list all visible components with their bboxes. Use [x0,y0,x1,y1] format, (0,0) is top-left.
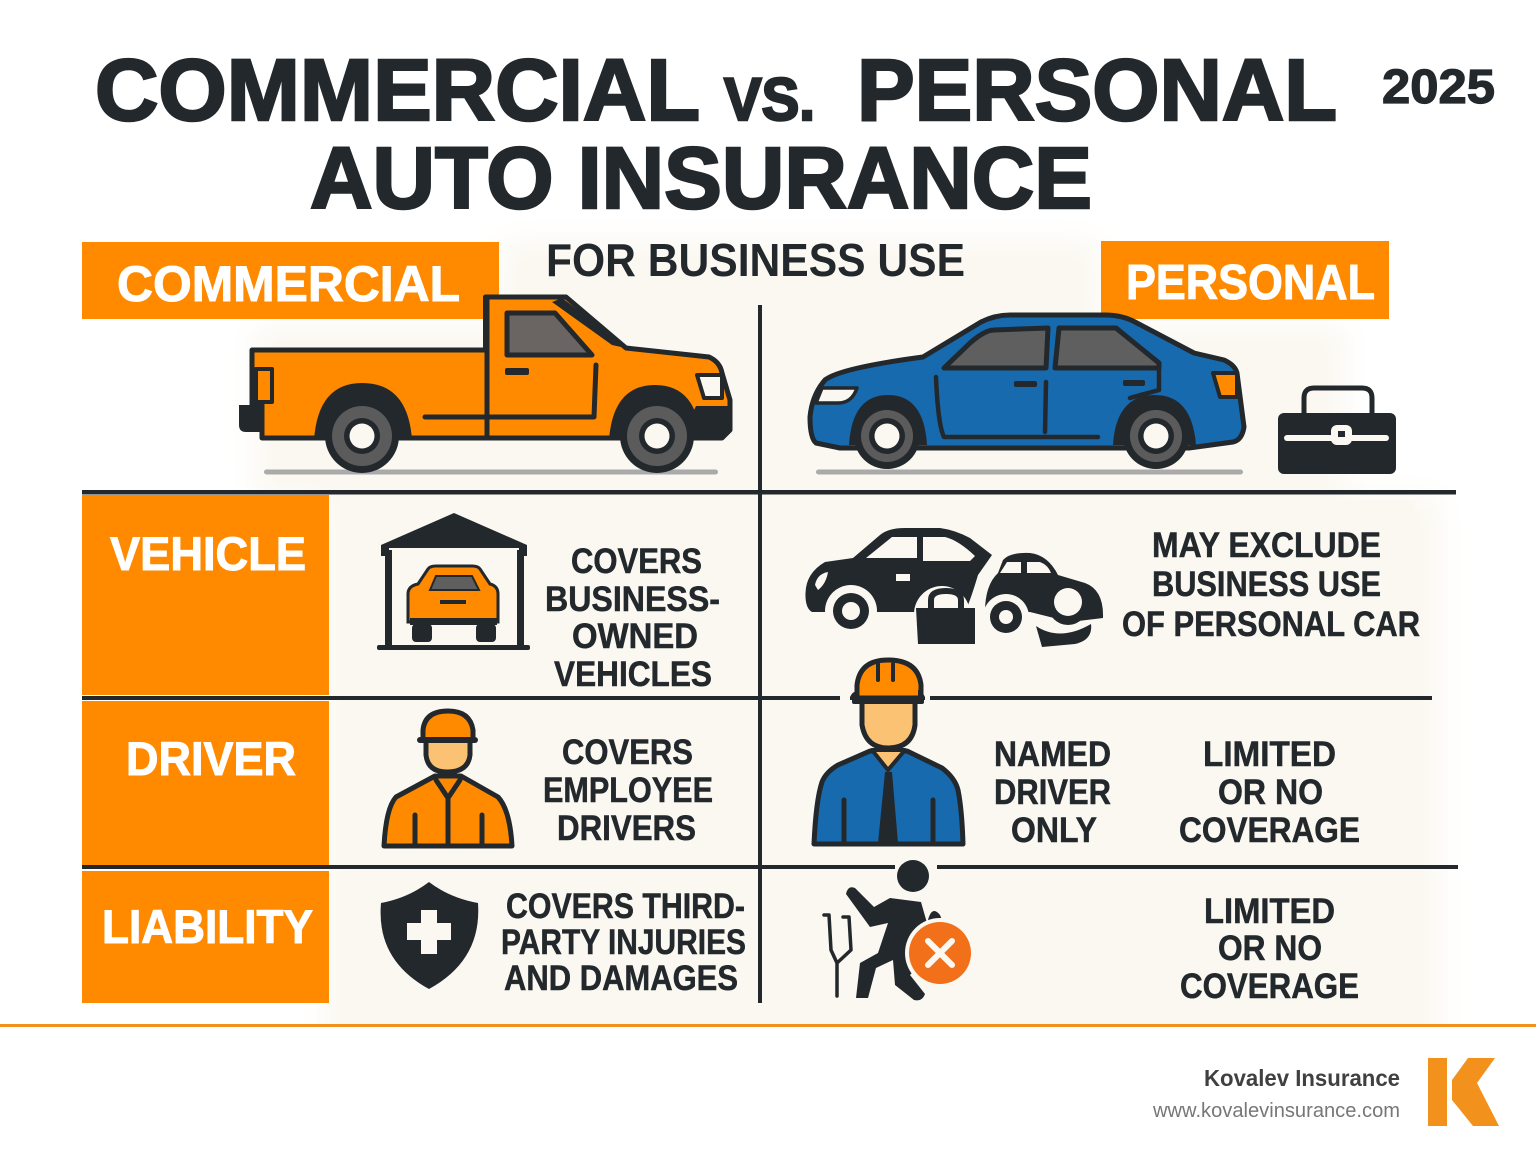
text: may exclude business use: BUSINESS USE [1152,565,1381,604]
text: named driver only [994,735,1111,850]
title: AUTO INSURANCE [310,130,1092,227]
icon: garage with orange car [377,513,530,650]
row label: vehicle: VEHICLE [110,527,306,580]
row label: liability: LIABILITY [102,900,313,953]
text: may exclude business use: MAY EXCLUDE [1152,526,1381,565]
text: covers business-owned vehicles: COVERS [571,542,702,581]
text: covers third-party injuries: PARTY INJURIES [501,923,746,962]
title [95,42,1337,227]
text: named driver only: NAMED [994,735,1111,774]
icon: briefcase [1278,388,1396,474]
text: covers employee drivers: COVERS [562,733,693,772]
icon: injured person with crutch and x badge [824,860,975,1000]
text: limited or no coverage (liability): LIMITED [1204,892,1335,931]
header: personal [1101,241,1389,319]
text: limited or no coverage (liability): COVERAGE [1180,967,1359,1006]
text: covers employee drivers [543,733,713,848]
header: commercial [82,242,499,319]
footer: brand text: www.kovalevinsurance.com [1152,1100,1400,1122]
icon: orange pickup truck [239,297,732,474]
text: limited or no coverage (driver): LIMITED [1203,735,1336,774]
text: covers business-owned vehicles: VEHICLES [554,655,712,694]
text: limited or no coverage (driver): OR NO [1218,773,1323,812]
text: limited or no coverage (liability): OR NO [1218,929,1322,968]
row label: driver [82,701,329,865]
text: covers business-owned vehicles [545,542,720,694]
icon: shield with cross [381,882,478,989]
text: covers business-owned vehicles: OWNED [572,617,698,656]
row label: driver: DRIVER [126,732,296,785]
footer: brand text [1152,1065,1400,1122]
footer: brand text: Kovalev Insurance [1204,1065,1400,1091]
text: limited or no coverage (driver): COVERAGE [1179,811,1360,850]
row label: vehicle [82,495,329,695]
header: commercial: COMMERCIAL [117,256,460,312]
text: covers third-party injuries [501,887,746,998]
footer: K logo [1428,1058,1499,1126]
icon: blue sedan [810,315,1244,474]
text: limited or no coverage (driver) [1179,735,1360,850]
title: VS. [724,66,815,133]
subtitle: FOR BUSINESS USE [546,234,965,286]
text: covers employee drivers: DRIVERS [557,809,696,848]
text: covers third-party injuries: AND DAMAGES [504,959,738,998]
text: named driver only: DRIVER [994,773,1111,812]
header: personal: PERSONAL [1126,256,1375,310]
text: named driver only: ONLY [1011,811,1097,850]
icon: named driver with hard hat [814,660,963,844]
text: covers employee drivers: EMPLOYEE [543,771,713,810]
icon: black cars and lock [805,528,1103,647]
icon: employee driver [384,711,512,846]
text: may exclude business use [1122,526,1420,644]
year: 2025 [1382,61,1495,114]
title: PERSONAL [857,42,1337,139]
row label: liability [82,871,329,1003]
text: covers business-owned vehicles: BUSINESS- [545,580,720,619]
title: COMMERCIAL [95,42,700,139]
text: limited or no coverage (liability) [1180,892,1359,1006]
text: covers third-party injuries: COVERS THIRD- [506,887,745,926]
text: may exclude business use: OF PERSONAL CAR [1122,605,1420,644]
